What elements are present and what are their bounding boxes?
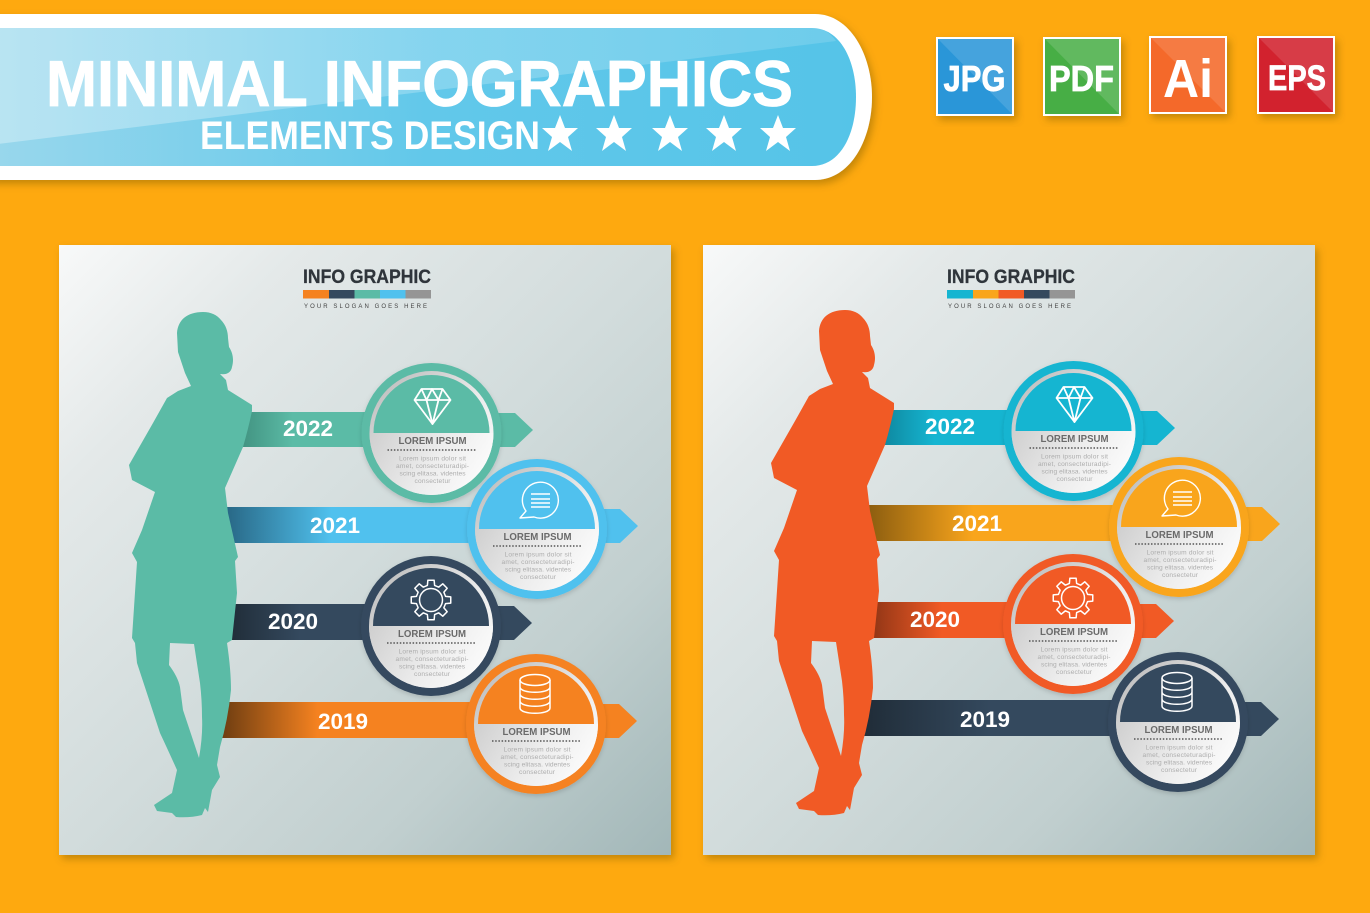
circle node 2020 — [361, 556, 501, 696]
circle node 2019: Lorem ipsum dolor sit — [504, 746, 571, 754]
circle node 2019 — [1108, 652, 1248, 792]
bar 2020 — [225, 604, 532, 640]
circle node 2022: scing elitasa. videntes — [400, 470, 466, 478]
circle node 2021 — [1109, 457, 1249, 597]
bar 2022 — [225, 412, 533, 447]
bar 2020: 2020 — [910, 607, 960, 632]
circle node 2022: consectetur — [1056, 476, 1093, 483]
circle node 2021: LOREM IPSUM — [1146, 530, 1214, 541]
format badge: Ai: Ai — [1163, 49, 1213, 109]
circle node 2022: Lorem ipsum dolor sit — [1041, 454, 1108, 460]
woman silhouette orange — [771, 310, 894, 815]
bar 2020: 2020 — [268, 609, 318, 634]
bar 2021 — [862, 505, 1280, 541]
format badge: JPG: JPG — [944, 58, 1006, 99]
circle node 2019: scing elitasa. videntes — [1146, 760, 1213, 766]
format badge: PDF — [1044, 38, 1120, 115]
circle node 2021: amet, consecteturadipi- — [1144, 557, 1216, 564]
bar 2019: 2019 — [960, 707, 1010, 732]
circle node 2020: scing elitasa. videntes — [1041, 662, 1108, 668]
title banner — [0, 14, 872, 180]
circle node 2019: LOREM IPSUM — [1144, 725, 1212, 736]
circle node 2019: LOREM IPSUM — [502, 727, 570, 738]
circle node 2019 — [466, 654, 606, 794]
slogan: YOUR SLOGAN GOES HERE — [948, 304, 1071, 310]
circle node 2022: consectetur — [414, 478, 451, 485]
bar 2019 — [215, 702, 637, 738]
bar 2019 — [857, 700, 1279, 736]
circle node 2020: Lorem ipsum dolor sit — [1040, 646, 1108, 654]
circle node 2022: scing elitasa. videntes — [1042, 468, 1108, 476]
circle node 2019: amet, consecteturadipi- — [1142, 752, 1216, 759]
rating stars — [542, 115, 796, 151]
format badge: PDF: PDF — [1049, 58, 1114, 99]
circle node 2019: consectetur — [1161, 767, 1198, 774]
format badge: EPS — [1258, 37, 1334, 113]
bar 2021 — [220, 507, 638, 543]
bar 2020 — [867, 602, 1174, 638]
circle node 2019: amet, consecteturadipi- — [500, 754, 574, 761]
bar 2019: 2019 — [318, 709, 368, 734]
panel heading: INFO GRAPHIC — [303, 266, 431, 288]
circle node 2020: consectetur — [1056, 669, 1093, 676]
bar 2022: 2022 — [925, 414, 975, 439]
panel: green timeline — [59, 245, 671, 855]
circle node 2021: scing elitasa. videntes — [505, 566, 572, 574]
circle node 2019: Lorem ipsum dolor sit — [1146, 744, 1213, 752]
slogan: YOUR SLOGAN GOES HERE — [304, 304, 427, 310]
colour strip — [303, 290, 431, 298]
bar 2022: 2022 — [283, 416, 333, 441]
circle node 2021: consectetur — [1162, 572, 1199, 579]
circle node 2022 — [362, 363, 502, 503]
circle node 2020: consectetur — [414, 671, 451, 678]
panel: orange timeline — [703, 245, 1315, 855]
circle node 2022: LOREM IPSUM — [398, 436, 466, 447]
circle node 2022: Lorem ipsum dolor sit — [399, 456, 466, 462]
colour strip — [947, 290, 1075, 298]
circle node 2020: LOREM IPSUM — [1040, 627, 1108, 638]
panel heading: INFO GRAPHIC — [947, 266, 1075, 288]
circle node 2021: Lorem ipsum dolor sit — [1146, 550, 1214, 556]
circle node 2022: LOREM IPSUM — [1040, 434, 1108, 445]
circle node 2019: consectetur — [519, 769, 556, 776]
woman silhouette green — [129, 312, 252, 817]
bar 2021: 2021 — [952, 511, 1002, 536]
format badge: JPG — [937, 38, 1013, 115]
circle node 2021: consectetur — [520, 574, 557, 581]
circle node 2021: LOREM IPSUM — [504, 532, 572, 543]
circle node 2021: amet, consecteturadipi- — [502, 559, 574, 566]
banner title: MINIMAL INFOGRAPHICS — [46, 47, 793, 120]
circle node 2022: amet, consecteturadipi- — [396, 463, 469, 470]
circle node 2020 — [1003, 554, 1143, 694]
circle node 2021 — [467, 459, 607, 599]
format badge: Ai — [1150, 37, 1226, 113]
circle node 2019: scing elitasa. videntes — [504, 762, 571, 768]
format badge: EPS: EPS — [1268, 59, 1326, 98]
circle node 2020: scing elitasa. videntes — [399, 664, 466, 670]
bar 2021: 2021 — [310, 513, 360, 538]
circle node 2020: amet, consecteturadipi- — [396, 656, 468, 663]
circle node 2022: amet, consecteturadipi- — [1038, 461, 1111, 468]
bar 2022 — [867, 410, 1175, 445]
banner subtitle: ELEMENTS DESIGN — [200, 114, 540, 158]
circle node 2020: LOREM IPSUM — [398, 629, 466, 640]
circle node 2021: scing elitasa. videntes — [1147, 564, 1214, 572]
circle node 2022 — [1004, 361, 1144, 501]
circle node 2020: Lorem ipsum dolor sit — [398, 648, 466, 656]
circle node 2020: amet, consecteturadipi- — [1038, 654, 1110, 661]
circle node 2021: Lorem ipsum dolor sit — [504, 552, 572, 558]
